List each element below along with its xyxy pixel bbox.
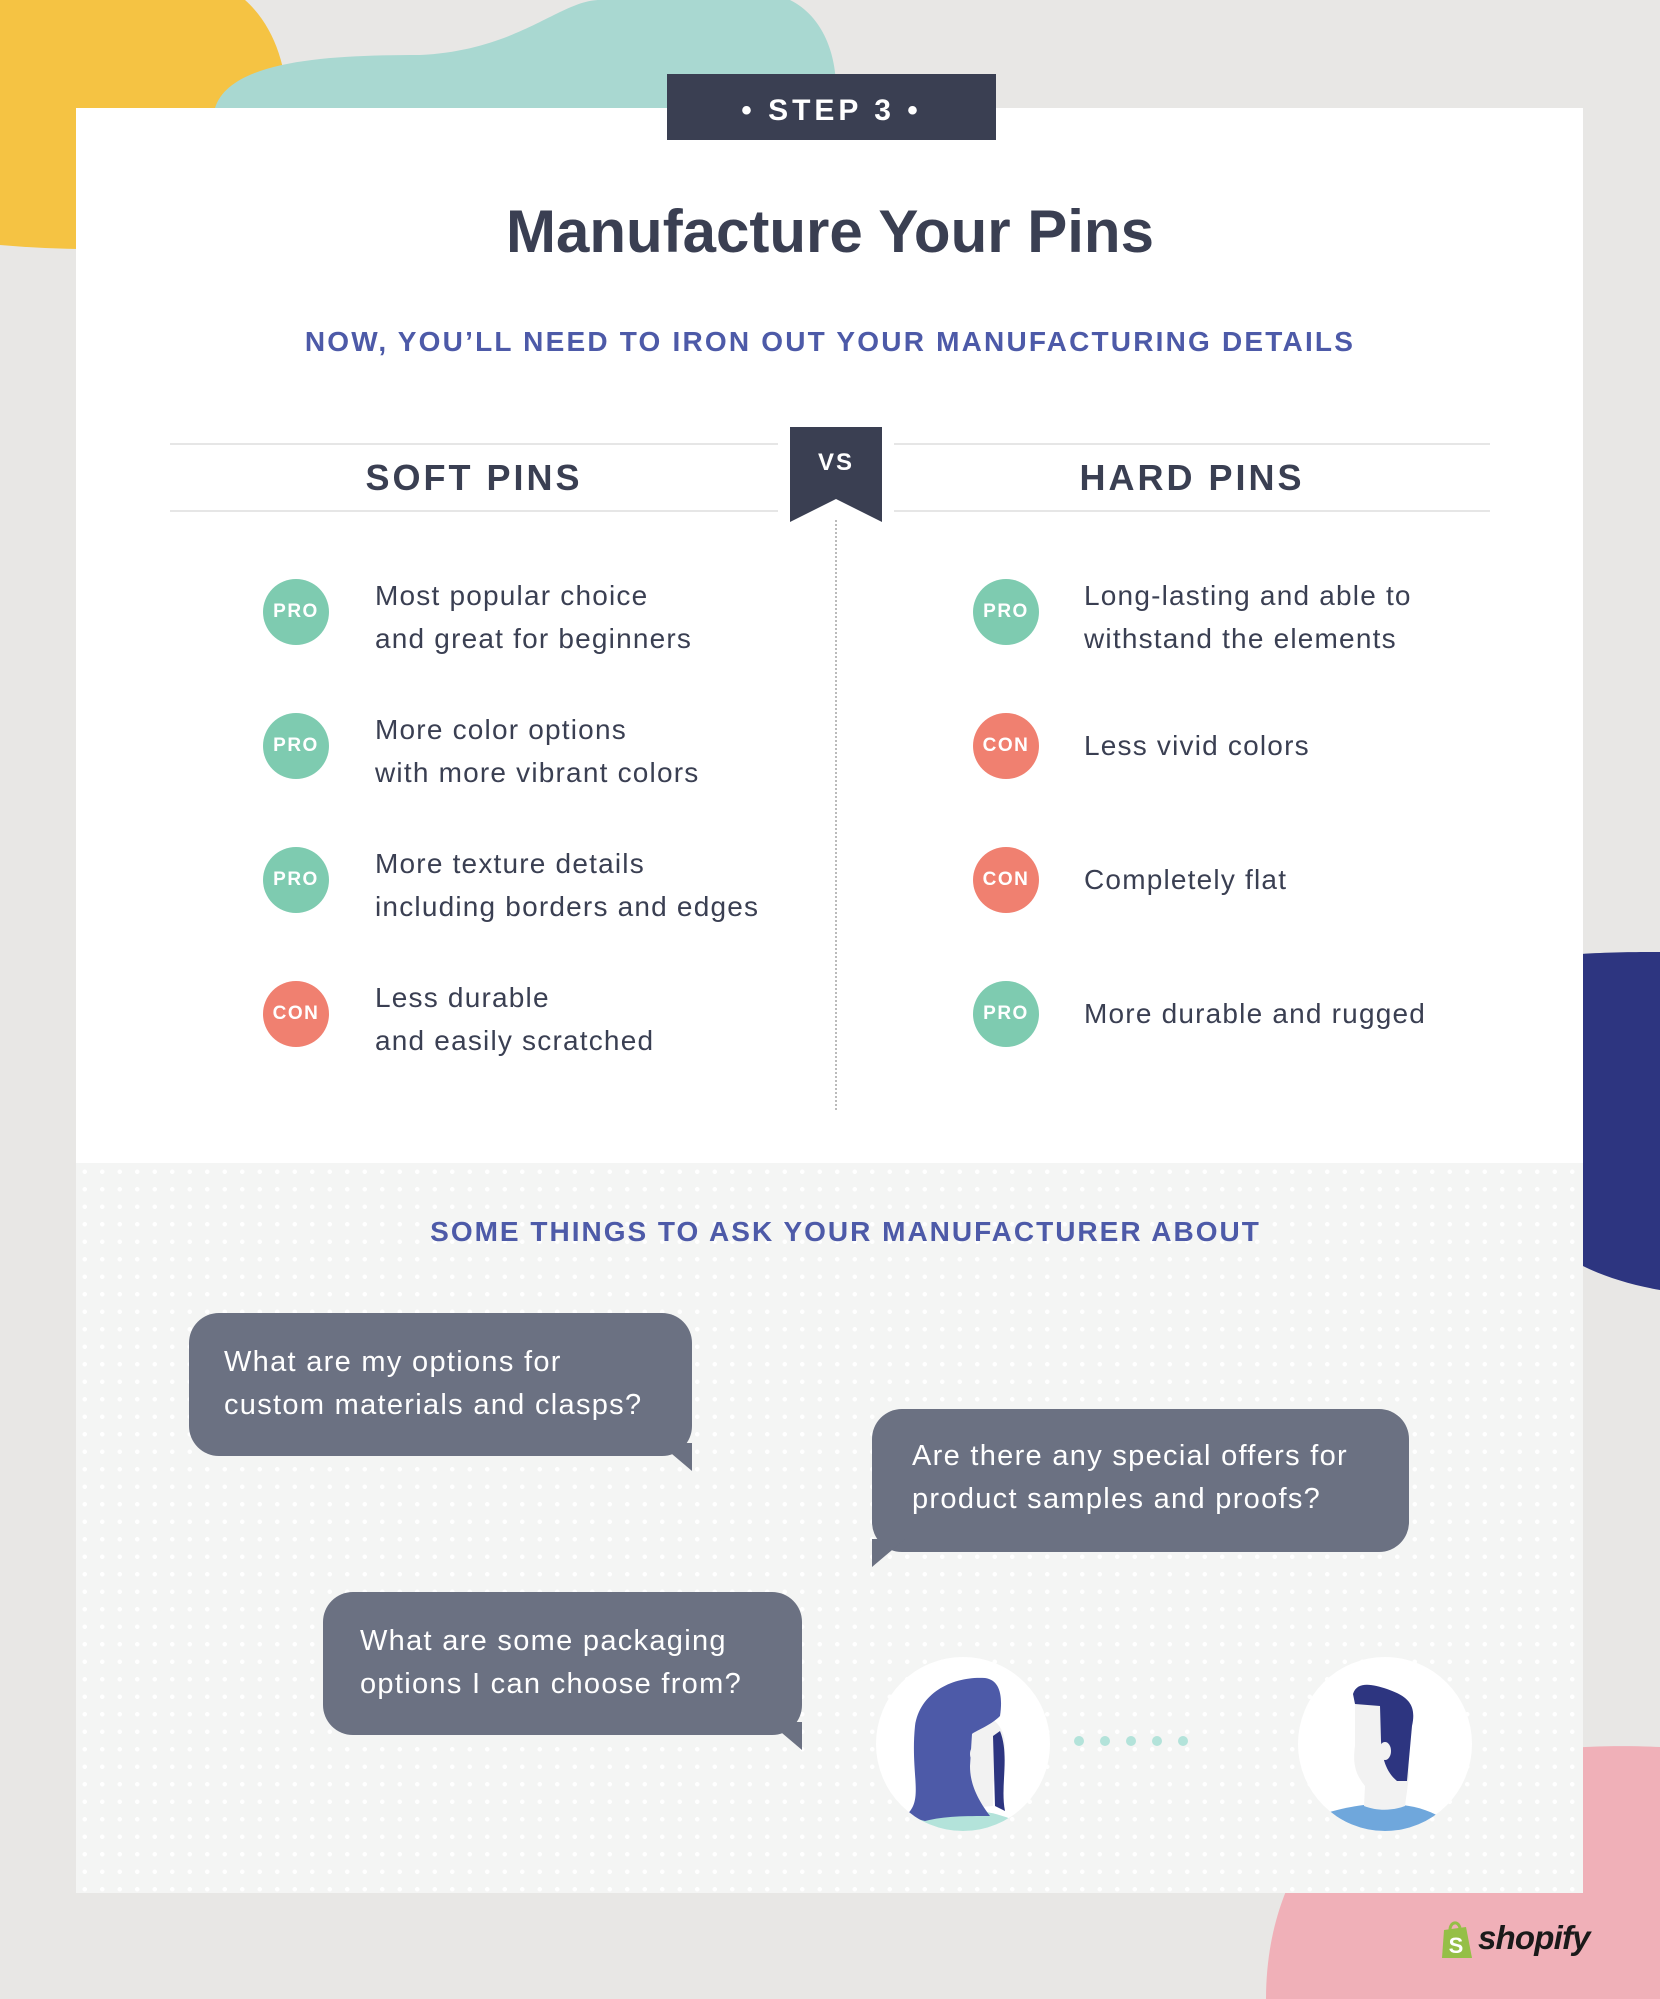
hard item 2: CON bbox=[983, 735, 1029, 756]
title: Manufacture Your Pins bbox=[506, 198, 1154, 265]
soft item 3: More texture details bbox=[375, 848, 645, 879]
hard item 4: PRO bbox=[983, 1003, 1029, 1024]
soft item 4: and easily scratched bbox=[375, 1025, 654, 1056]
hard item 4 bbox=[973, 981, 1426, 1047]
logo: shopify: shopify bbox=[1478, 1919, 1590, 1956]
soft item 2: with more vibrant colors bbox=[375, 757, 699, 788]
hard item 1: Long-lasting and able to bbox=[1084, 580, 1412, 611]
soft item 1: PRO bbox=[273, 601, 319, 622]
subtitle: NOW, YOU’LL NEED TO IRON OUT YOUR MANUFACTURING DETAILS bbox=[305, 326, 1355, 357]
icon: man avatar bbox=[1298, 1657, 1472, 1831]
heading: hard pins: HARD PINS bbox=[1079, 457, 1305, 498]
hard item 3: Completely flat bbox=[1084, 864, 1287, 895]
bubble 3: options I can choose from? bbox=[360, 1668, 742, 1700]
hard item 2 bbox=[973, 713, 1310, 779]
soft item 2: PRO bbox=[273, 735, 319, 756]
vs badge bbox=[790, 427, 882, 522]
dotted divider bbox=[835, 520, 837, 1110]
panel: soft pins list bbox=[263, 579, 759, 1056]
soft item 4: Less durable bbox=[375, 982, 550, 1013]
hard item 3 bbox=[973, 847, 1287, 913]
bubble 2 bbox=[872, 1409, 1409, 1567]
soft item 2 bbox=[263, 713, 699, 788]
soft item 1 bbox=[263, 579, 692, 654]
bubble 3 bbox=[323, 1592, 802, 1750]
soft item 4: CON bbox=[273, 1003, 319, 1024]
bubble 2: Are there any special offers for bbox=[912, 1440, 1348, 1472]
dots connector bbox=[1074, 1736, 1188, 1746]
hard item 1: PRO bbox=[983, 601, 1029, 622]
soft item 3: PRO bbox=[273, 869, 319, 890]
vs badge: VS bbox=[818, 449, 854, 476]
hard item 1 bbox=[973, 579, 1412, 654]
step badge bbox=[667, 74, 996, 140]
bubble 1: What are my options for bbox=[224, 1346, 562, 1378]
hard item 4: More durable and rugged bbox=[1084, 998, 1426, 1029]
soft item 4 bbox=[263, 981, 654, 1056]
soft item 1: and great for beginners bbox=[375, 623, 692, 654]
hard item 3: CON bbox=[983, 869, 1029, 890]
soft item 3: including borders and edges bbox=[375, 891, 759, 922]
panel: hard pins list bbox=[973, 579, 1426, 1047]
bubble 1: custom materials and clasps? bbox=[224, 1389, 642, 1421]
bubble 1 bbox=[189, 1313, 692, 1471]
soft item 2: More color options bbox=[375, 714, 627, 745]
bubble 3: What are some packaging bbox=[360, 1625, 727, 1657]
section heading: SOME THINGS TO ASK YOUR MANUFACTURER ABOUT bbox=[430, 1216, 1261, 1247]
step badge: • STEP 3 • bbox=[741, 94, 922, 127]
logo: shopify: S bbox=[1449, 1933, 1463, 1958]
bottom panel bbox=[76, 1163, 1583, 1893]
soft item 1: Most popular choice bbox=[375, 580, 648, 611]
heading: soft pins: SOFT PINS bbox=[365, 457, 583, 498]
header lines bbox=[170, 443, 778, 445]
white card bbox=[76, 108, 1583, 1163]
bubble 2: product samples and proofs? bbox=[912, 1483, 1321, 1515]
icon: woman avatar bbox=[876, 1657, 1050, 1831]
hard item 1: withstand the elements bbox=[1084, 623, 1397, 654]
soft item 3 bbox=[263, 847, 759, 922]
hard item 2: Less vivid colors bbox=[1084, 730, 1310, 761]
